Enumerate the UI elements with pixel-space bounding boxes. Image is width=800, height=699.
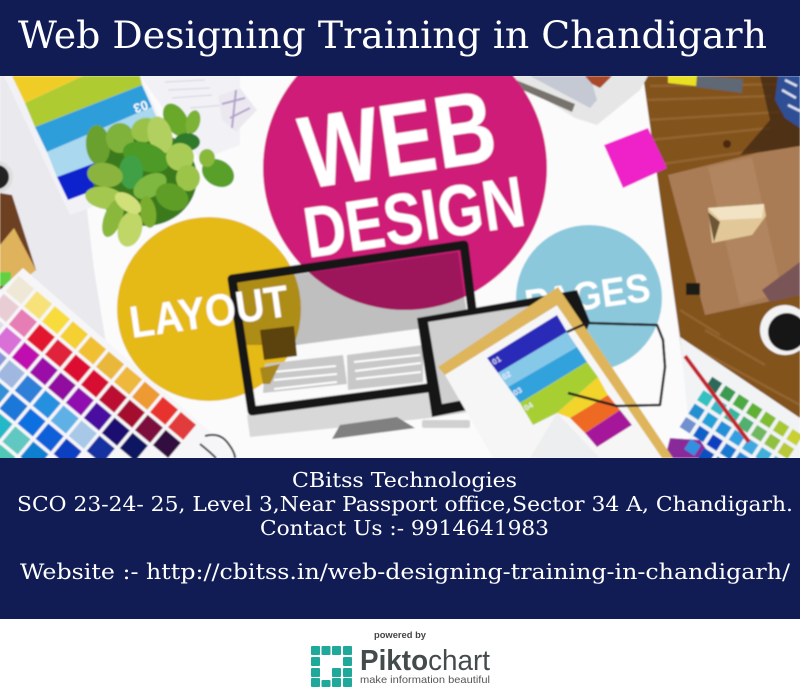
pink circle — [262, 76, 548, 311]
glasses — [567, 323, 665, 406]
title: Web Designing Training in Chandigarh — [18, 14, 767, 57]
piktochart logo mark — [311, 646, 352, 687]
piktochart branding — [311, 630, 490, 687]
piktochart wordmark: Piktochart — [360, 645, 490, 677]
blue circle — [516, 225, 662, 371]
header band — [0, 0, 800, 76]
wood desk right — [643, 76, 800, 418]
small white sheet at bottom — [532, 414, 598, 457]
tagline: make information beautiful — [360, 674, 490, 686]
yellow folder — [438, 287, 673, 458]
company name: CBitss Technologies — [292, 468, 517, 492]
address: SCO 23-24- 25, Level 3,Near Passport office,Sector 34 A, Chandigarh. — [17, 492, 793, 516]
top-centre papers and clip — [505, 76, 648, 125]
coffee cup left — [0, 163, 11, 191]
infographic stripes on page: 04 — [522, 400, 535, 413]
coffee cup right — [760, 305, 800, 355]
wood desk left — [0, 193, 36, 290]
red pencil — [685, 356, 749, 442]
infographic stripes on page: 02 — [500, 369, 513, 382]
left colour swatch sheet — [0, 267, 197, 458]
yellow circle — [117, 217, 301, 401]
small spiral notebook — [708, 204, 766, 243]
tablet — [417, 290, 590, 428]
colour stripe brochure: 03 — [131, 97, 150, 116]
white page — [445, 305, 662, 458]
right colour swatch sheet — [666, 336, 800, 458]
colour stripe brochure — [6, 76, 158, 213]
website: Website :- http://cbitss.in/web-designing-training-in-chandigarh/ — [20, 560, 791, 585]
plant — [83, 99, 239, 249]
small glasses bottom left — [200, 435, 235, 458]
desktop monitor — [232, 245, 484, 439]
infographic stripes on page: 01 — [490, 354, 503, 367]
blue fabric top right — [775, 76, 800, 128]
powered by: powered by — [374, 630, 427, 641]
contact number: Contact Us :- 9914641983 — [260, 516, 549, 540]
LAYOUT text: LAYOUT — [126, 275, 292, 348]
WEB text: WEB — [292, 68, 503, 211]
note paper behind plant — [140, 76, 240, 160]
infographic stripes on page: 03 — [512, 385, 524, 398]
pens top right — [668, 76, 743, 93]
white paper sheet — [87, 76, 693, 458]
infographic stripes on page — [487, 315, 632, 447]
pink sticky note — [604, 128, 667, 188]
footer contact band — [0, 458, 800, 619]
crumpled paper — [218, 88, 257, 132]
DESIGN text: DESIGN — [299, 162, 530, 274]
kraft clipboard — [668, 146, 800, 315]
hero photo: web design desk — [0, 76, 800, 458]
PAGES text: PAGES — [522, 266, 653, 327]
